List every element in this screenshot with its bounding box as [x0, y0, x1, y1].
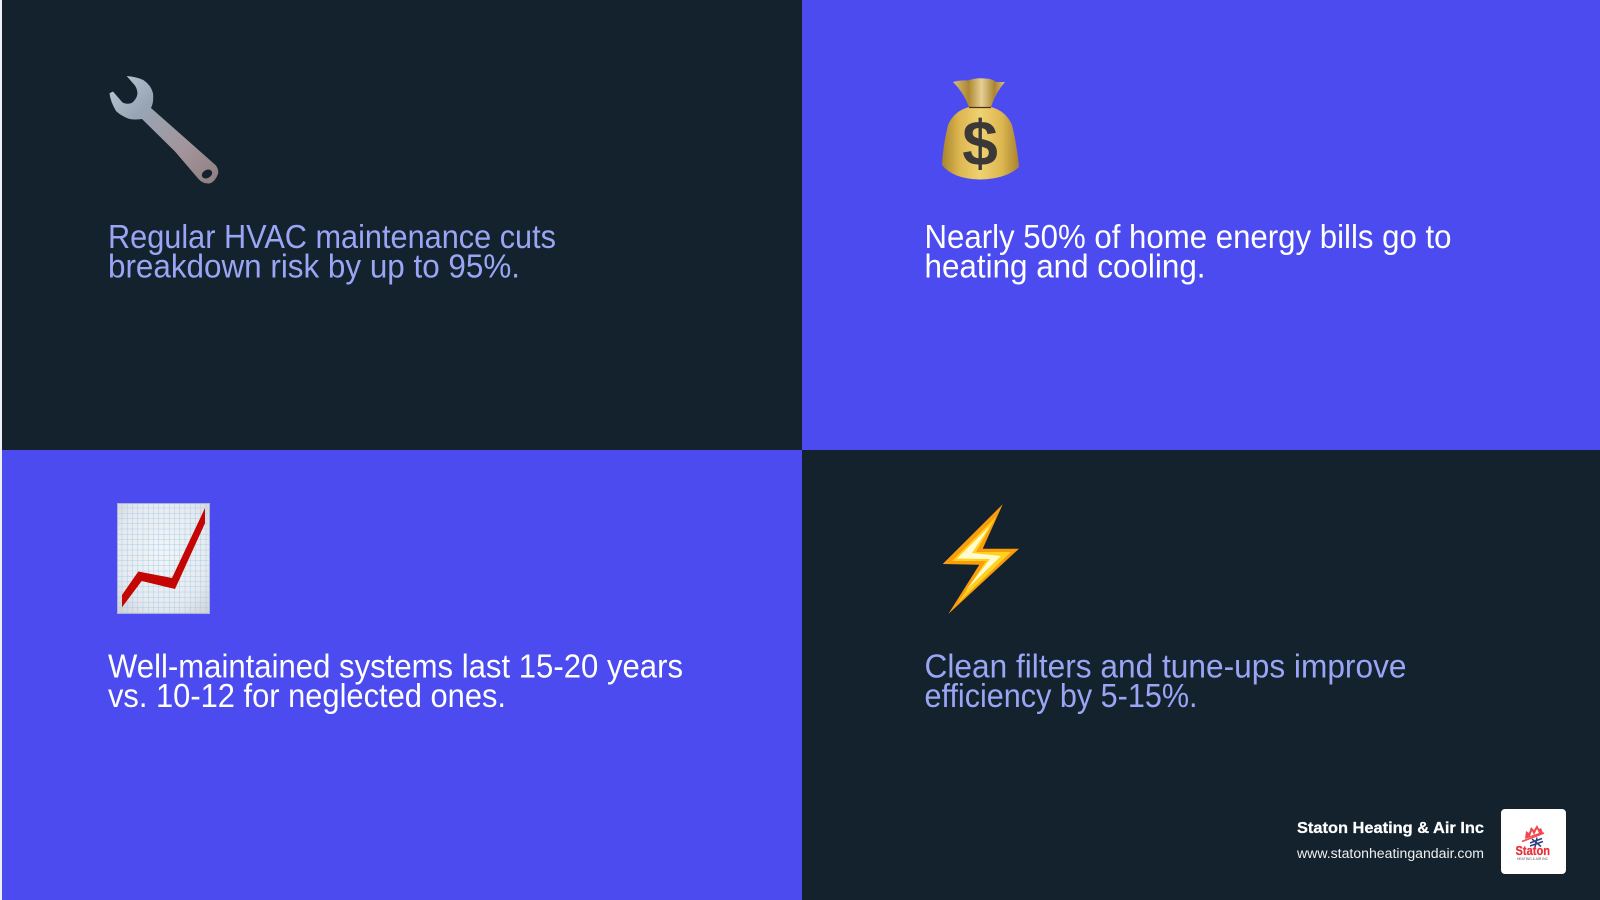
text: energy fact: heating and cooling.	[924, 248, 1206, 284]
icon: money bag	[942, 78, 1019, 180]
icon: money bag: $	[962, 107, 998, 179]
icon: lightning bolt	[943, 504, 1019, 614]
text: lifespan fact: vs. 10-12 for neglected ones.	[108, 677, 506, 714]
footer: brand	[1296, 809, 1566, 874]
logo	[1501, 809, 1566, 874]
text: maintenance fact: breakdown risk by up to 95%.	[108, 248, 520, 284]
logo: Staton	[1516, 844, 1550, 858]
panel: breakdown risk	[2, 0, 802, 450]
panel: efficiency	[802, 450, 1600, 900]
logo: HEATING & AIR INC	[1517, 857, 1548, 861]
text: efficiency fact: Clean filters and tune-ups improve	[924, 648, 1406, 684]
panel: system lifespan	[2, 450, 802, 900]
company name: Staton Heating & Air Inc	[1297, 820, 1484, 837]
text: maintenance fact: Regular HVAC maintenance cuts	[108, 218, 556, 255]
left edge strip	[0, 0, 2, 900]
website: www.statonheatingandair.com	[1296, 846, 1484, 861]
text: efficiency fact: efficiency by 5-15%.	[924, 677, 1198, 714]
icon: wrench	[110, 76, 218, 184]
text: lifespan fact: Well-maintained systems last 15-20 years	[108, 648, 683, 684]
icon: rising chart	[117, 503, 210, 614]
panel: energy bills	[802, 0, 1600, 450]
text: energy fact: Nearly 50% of home energy bills go to	[924, 218, 1452, 255]
